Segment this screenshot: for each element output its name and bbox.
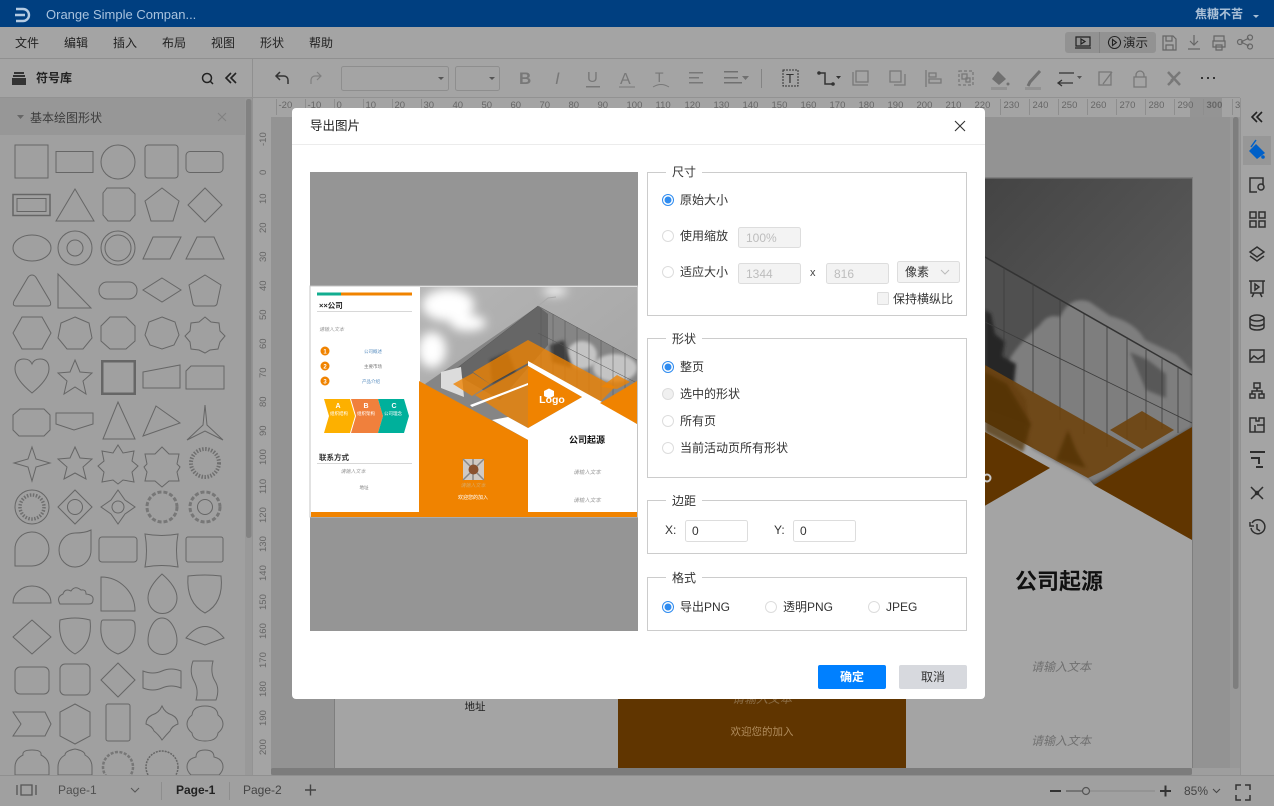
- row 14: [13, 704, 223, 744]
- menu bar: 形状: [260, 36, 284, 50]
- left ruler: 20: [258, 222, 269, 233]
- top ruler: 30: [424, 100, 434, 111]
- input: y: [794, 520, 856, 542]
- row 10: [15, 530, 223, 567]
- icon: text box: T: [786, 71, 794, 86]
- top ruler: 260: [1090, 100, 1106, 111]
- top ruler: 200: [916, 100, 932, 111]
- left ruler: 60: [258, 338, 269, 349]
- shape grid: [13, 145, 225, 783]
- top ruler: 20: [394, 100, 405, 111]
- orange left block: [419, 381, 528, 517]
- fieldset: size: 尺寸: [672, 165, 696, 179]
- button: confirm: [818, 665, 886, 689]
- white wedge: [470, 383, 528, 440]
- left ruler: 180: [258, 681, 269, 697]
- chevron steps: B: [363, 403, 369, 410]
- row 7: [13, 402, 223, 440]
- left ruler: 50: [258, 309, 269, 320]
- checkbox: keep aspect: 保持横纵比: [893, 291, 953, 306]
- address label: 地址: [464, 700, 486, 713]
- top ruler: 0: [336, 100, 342, 111]
- symbol library header: [12, 70, 236, 85]
- file action icons: [1163, 35, 1252, 50]
- icon: redo: [311, 72, 321, 84]
- icon: user menu arrow: [1253, 15, 1259, 18]
- top ruler: -10: [308, 100, 321, 111]
- placeholder text: 请输入文本: [573, 497, 602, 504]
- top ruler: 70: [540, 100, 550, 111]
- right orange triangle: [600, 381, 637, 424]
- logo mark: [539, 388, 565, 406]
- page tab: Page-2: [243, 783, 282, 797]
- menu bar: 帮助: [309, 36, 333, 50]
- white right block: [528, 361, 637, 512]
- fieldset: shape: [648, 332, 966, 478]
- top ruler: 3: [1235, 100, 1240, 111]
- row 12: [13, 618, 224, 654]
- title bar: [0, 0, 1274, 27]
- text format icons: U: [587, 69, 598, 86]
- row 2: [13, 188, 222, 222]
- text format icons: T: [655, 69, 664, 85]
- top ruler: 130: [714, 100, 729, 111]
- fieldset: margin: [648, 494, 966, 554]
- user name: 焦糖不苦: [1195, 6, 1243, 21]
- placeholder text: 请输入文本: [1031, 734, 1093, 748]
- left ruler: 90: [258, 425, 269, 436]
- top ruler: 120: [684, 100, 700, 111]
- fieldset: format: [648, 570, 966, 630]
- left ruler: 190: [258, 710, 269, 726]
- icon: collapse panel: [1252, 112, 1262, 122]
- bottom orange strip: [311, 512, 637, 517]
- left ruler: 120: [258, 507, 269, 523]
- numbered list: 2: [323, 364, 327, 370]
- radio: original size: 原始大小: [680, 193, 728, 207]
- left ruler: [253, 117, 271, 775]
- top ruler: 160: [800, 100, 816, 111]
- icon: text box: [783, 70, 798, 86]
- radio: selected shapes: 选中的形状: [680, 386, 740, 401]
- row 13: [15, 661, 218, 700]
- fieldset: margin: 边距: [672, 494, 696, 508]
- top ruler: 170: [830, 100, 845, 111]
- menu bar: [0, 27, 1274, 59]
- chevron steps: 公司理念: [384, 410, 402, 416]
- top ruler: 280: [1148, 100, 1164, 111]
- chevron steps: [324, 399, 409, 433]
- numbered list: 公司概述: [364, 348, 382, 355]
- numbered list: 主要市场: [364, 363, 382, 370]
- menu bar: 布局: [162, 36, 186, 50]
- left ruler: -10: [258, 132, 269, 146]
- page selector: Page-1: [58, 783, 97, 797]
- fieldset: margin: X:: [665, 523, 676, 537]
- radio: fit: 适应大小: [680, 264, 728, 279]
- button: cancel: [899, 665, 967, 689]
- top ruler: 110: [656, 100, 671, 111]
- icon: connector: [817, 71, 841, 86]
- icon: add page: [305, 784, 316, 796]
- input: scale: 100%: [746, 231, 777, 245]
- section heading: 基本绘图形状: [30, 110, 102, 125]
- fieldset: shape: 形状: [672, 332, 696, 346]
- top ruler: 90: [598, 100, 608, 111]
- preview page: [310, 286, 638, 517]
- menu bar: 文件: [15, 35, 39, 50]
- radio: scale: [662, 228, 728, 243]
- top ruler: -20: [278, 100, 292, 111]
- icon: collapse: [226, 73, 236, 83]
- preview photo: [420, 287, 637, 440]
- preview panel: [310, 172, 638, 631]
- input: height: [826, 264, 888, 284]
- shape tool icons: [853, 70, 1180, 87]
- icon: undo: [276, 72, 288, 84]
- radio: fit: [662, 264, 728, 279]
- chevron steps: A: [335, 403, 341, 410]
- welcome text: 欢迎您的加入: [458, 494, 488, 501]
- top ruler: 240: [1032, 100, 1048, 111]
- icon: fill color: [991, 71, 1010, 90]
- top ruler: 140: [742, 100, 758, 111]
- radio: whole page: 整页: [680, 359, 704, 374]
- radio: all pages: [662, 414, 716, 428]
- icon: fullscreen: [1236, 785, 1250, 800]
- radio: transparent png: 透明PNG: [783, 600, 833, 614]
- icon: selector chevron: [131, 788, 139, 792]
- left info column: 地址: [360, 484, 369, 490]
- top ruler: 60: [510, 100, 521, 111]
- placeholder text: 请输入文本: [573, 469, 602, 476]
- left ruler: 110: [258, 479, 269, 494]
- icon: play circle: [1109, 36, 1121, 48]
- left info column: ××公司: [319, 301, 343, 310]
- top ruler: 290: [1178, 100, 1193, 111]
- sky photo: [985, 178, 1192, 485]
- input: width: [738, 264, 800, 284]
- fieldset: size: [648, 165, 966, 316]
- text format icons: [519, 69, 749, 88]
- dialog title: 导出图片: [310, 119, 360, 133]
- panel: export image dialog: [292, 108, 985, 699]
- button: confirm: 确定: [840, 669, 864, 684]
- logo fragment: [984, 474, 990, 482]
- top ruler: 10: [366, 100, 376, 111]
- left info column: 请输入文本: [319, 326, 345, 333]
- icon: more: [1201, 77, 1215, 79]
- bottom status bar: [0, 775, 1274, 806]
- left ruler: 100: [258, 449, 269, 465]
- numbered list: [320, 346, 382, 386]
- left ruler: 40: [258, 280, 269, 291]
- chevron steps: 组织架构: [357, 410, 375, 417]
- top ruler: 150: [772, 100, 787, 111]
- canvas scrollbars: [271, 117, 1240, 775]
- icon: close: [955, 121, 965, 131]
- numbered list: 3: [323, 380, 327, 386]
- heading: company origin: 公司起源: [1015, 569, 1103, 594]
- top ruler: 250: [1062, 100, 1077, 111]
- top ruler: 50: [482, 100, 492, 111]
- radio: active page shapes: 当前活动页所有形状: [680, 440, 788, 455]
- menu bar: 插入: [113, 36, 137, 50]
- icon: line color: [1025, 71, 1041, 90]
- left info column: 请输入文本: [340, 468, 366, 475]
- row 1: [15, 145, 223, 179]
- left ruler: 0: [258, 170, 269, 175]
- row 8: [14, 445, 219, 487]
- button: cancel: 取消: [921, 670, 945, 684]
- fieldset: size: x: [810, 267, 816, 279]
- radio: all pages: 所有页: [680, 414, 716, 428]
- numbered list: 产品介绍: [362, 378, 380, 385]
- sidebar tool icons: [1249, 178, 1265, 534]
- input: scale: [738, 228, 800, 248]
- icon: search: [202, 74, 213, 84]
- radio: jpeg: [868, 600, 917, 614]
- active page tab: Page-1: [176, 783, 216, 797]
- row 15: [15, 749, 223, 783]
- team photo thumbnail: [463, 459, 484, 480]
- radio: scale: 使用缩放: [680, 228, 728, 243]
- top ruler: 180: [858, 100, 874, 111]
- top ruler: 210: [946, 100, 961, 111]
- logo mark: Logo: [539, 394, 565, 406]
- font size select: [456, 66, 500, 90]
- left info column: 联系方式: [319, 452, 349, 462]
- select: unit: 像素: [905, 265, 929, 279]
- left ruler: 150: [258, 594, 269, 610]
- orange translucent shapes: [453, 340, 630, 428]
- input: x: 0: [692, 524, 699, 538]
- presentation label: 演示: [1123, 35, 1148, 50]
- numbered list: 1: [323, 350, 327, 356]
- right sidebar: [1240, 59, 1274, 775]
- presentation buttons: [1065, 32, 1156, 53]
- left ruler: 140: [258, 565, 269, 581]
- text format icons: B: [519, 69, 531, 88]
- panel: basic shapes library: [0, 98, 252, 783]
- top ruler: 230: [1004, 100, 1019, 111]
- chevron steps: C: [391, 403, 397, 410]
- row 6: [15, 359, 224, 394]
- input: x: [686, 520, 748, 542]
- preview heading: 公司起源: [569, 434, 605, 445]
- placeholder text: 请输入文本: [1031, 660, 1093, 674]
- top ruler: 300: [1206, 100, 1222, 111]
- radio: jpeg: JPEG: [886, 600, 917, 614]
- icon: fill (active): [1249, 140, 1265, 159]
- top ruler: 190: [888, 100, 903, 111]
- zoom control: 85%: [1184, 784, 1208, 798]
- icon: app logo: [15, 9, 29, 21]
- left ruler: 80: [258, 396, 269, 407]
- text format icons: I: [555, 69, 560, 88]
- row 11: [13, 574, 221, 614]
- row 9: [15, 490, 220, 524]
- placeholder text: 请输入文本: [460, 482, 486, 489]
- left ruler: 170: [258, 652, 269, 668]
- left ruler: 10: [258, 193, 269, 204]
- translucent orange overlay: [985, 365, 1174, 478]
- left ruler: 70: [258, 367, 269, 378]
- left info column: [311, 287, 419, 512]
- chevron steps: 组织结构: [330, 410, 348, 417]
- radio: png: 导出PNG: [680, 600, 730, 614]
- section heading: [17, 110, 226, 125]
- menu bar: 编辑: [64, 35, 88, 50]
- font family select: [342, 66, 448, 90]
- fieldset: format: 格式: [672, 570, 696, 585]
- select: unit: [898, 262, 960, 282]
- top ruler: 40: [452, 100, 463, 111]
- input: height: 816: [834, 267, 854, 281]
- orange triangles: [618, 427, 1192, 768]
- toolbar: [0, 59, 1274, 99]
- input: width: 1344: [746, 267, 773, 281]
- left ruler: 30: [258, 251, 269, 262]
- fieldset: margin: Y:: [774, 523, 785, 537]
- radio: whole page: [662, 359, 704, 374]
- icon: pages: [17, 785, 36, 795]
- icon: screen play: [1075, 37, 1091, 48]
- placeholder text under dialog edge: 请输入文本: [732, 692, 794, 706]
- input: y: 0: [800, 524, 807, 538]
- row 5: [13, 317, 225, 353]
- building glass: [985, 256, 1192, 485]
- text format icons: A: [620, 71, 631, 88]
- top ruler: 220: [974, 100, 990, 111]
- symbol library header: 符号库: [36, 70, 72, 85]
- menu bar: 视图: [211, 35, 235, 50]
- zoom control: [1050, 784, 1220, 798]
- canvas page behind dialog: [334, 178, 1192, 768]
- top ruler: 270: [1120, 100, 1135, 111]
- top ruler: [253, 98, 1240, 117]
- left ruler: 130: [258, 536, 269, 552]
- row 4: [13, 274, 221, 308]
- top ruler: 80: [568, 100, 579, 111]
- top ruler: 100: [626, 100, 642, 111]
- welcome text: 欢迎您的加入: [730, 725, 794, 738]
- logo triangle: [528, 366, 582, 428]
- left ruler: 200: [258, 739, 269, 755]
- row 3: [13, 231, 224, 265]
- icon: library: [12, 72, 26, 85]
- left ruler: 160: [258, 623, 269, 639]
- document name: Orange Simple Compan...: [46, 7, 196, 22]
